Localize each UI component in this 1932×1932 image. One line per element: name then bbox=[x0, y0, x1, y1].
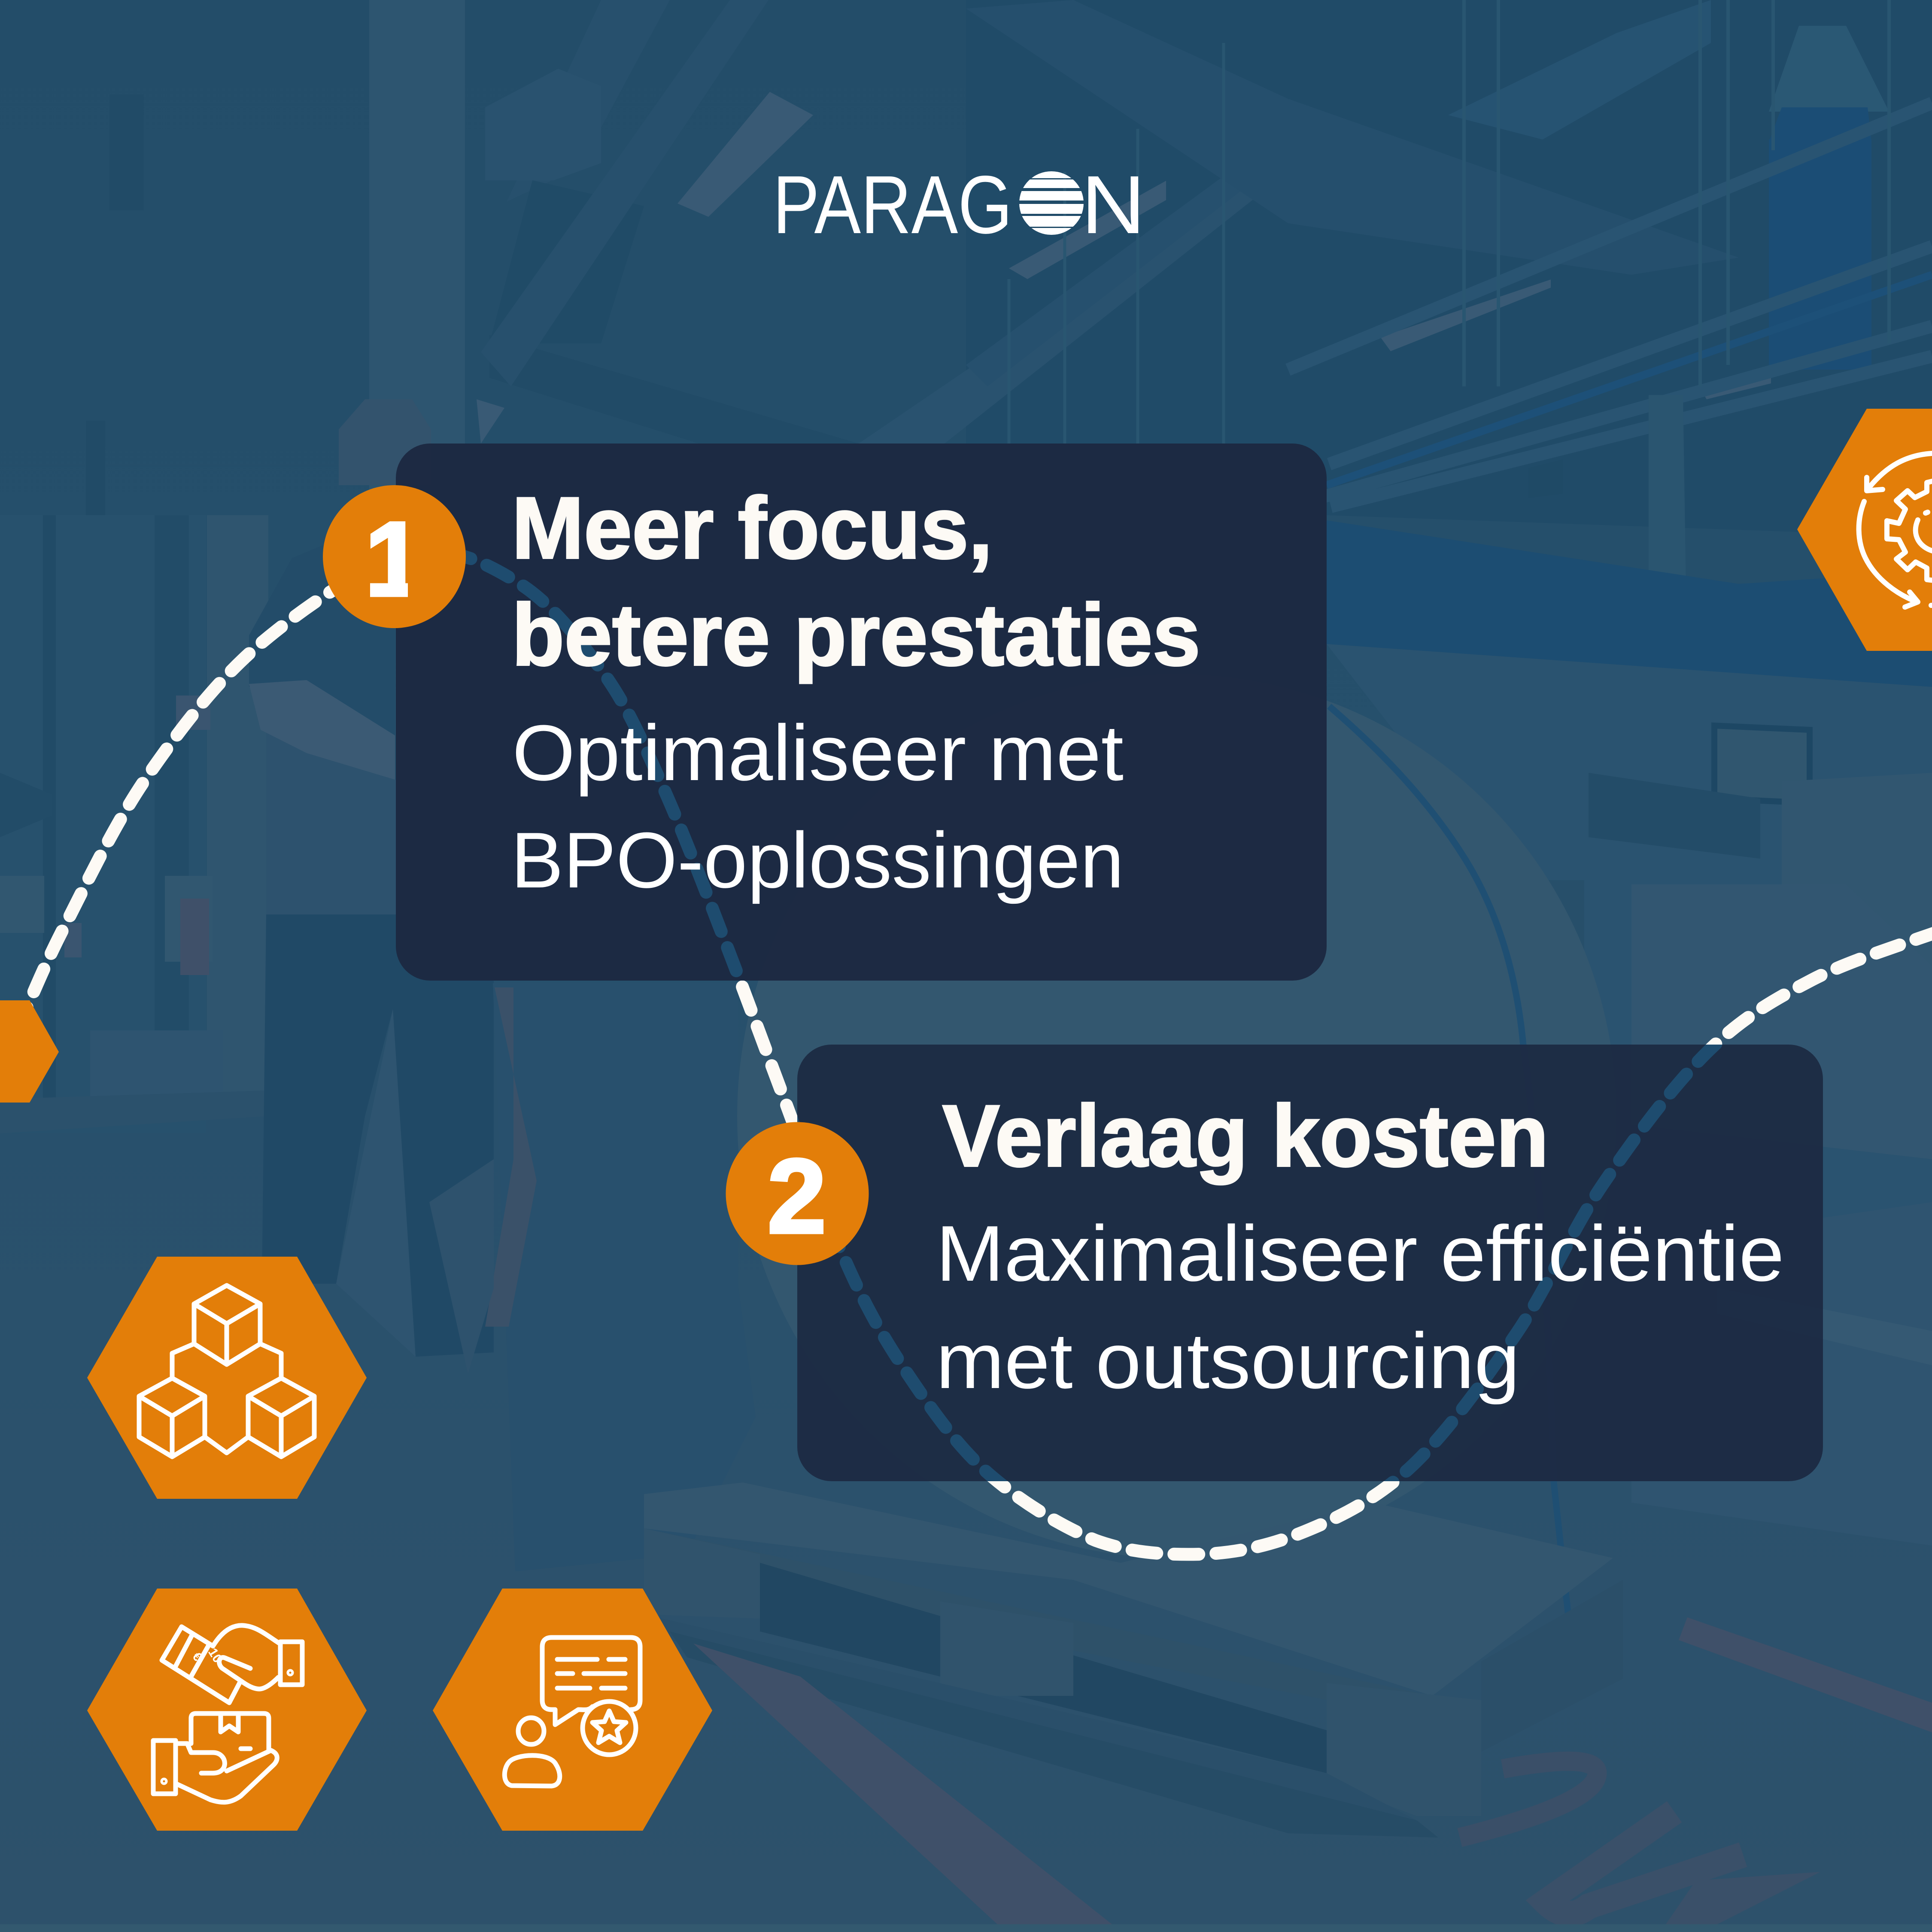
panel: step 2 bbox=[797, 1045, 1823, 1481]
hexagon icon: payment and parcel bbox=[87, 1589, 367, 1831]
pallet bbox=[644, 1482, 1613, 1696]
logo: Paragon: O bbox=[1026, 158, 1090, 251]
step 1 heading bbox=[512, 479, 1200, 684]
coil strap bbox=[1329, 706, 1570, 1631]
machinery right bbox=[1327, 644, 1932, 1245]
logo: Paragon bbox=[778, 171, 1139, 235]
logo globe bbox=[1018, 171, 1086, 236]
panel: step 1 bbox=[396, 444, 1327, 981]
step 1 body text bbox=[511, 708, 1124, 904]
banknote labels: 10 bbox=[205, 1646, 225, 1665]
number badge 1 bbox=[323, 485, 466, 628]
step 1 body text: BPO-oplossingen bbox=[511, 816, 1124, 904]
ceiling beams and ducts bbox=[966, 0, 1932, 537]
banknote labels: € bbox=[189, 1650, 205, 1664]
step 2 body text: met outsourcing bbox=[936, 1316, 1520, 1405]
number badge 1: 1 bbox=[365, 500, 423, 618]
blue duct bbox=[1327, 520, 1932, 687]
number badge 2 bbox=[726, 1122, 869, 1265]
hexagon icon: process gear, cut by right edge bbox=[1797, 409, 1932, 651]
bottom strip bbox=[0, 1924, 1932, 1932]
dashed route: white segments outside panels bbox=[17, 552, 1932, 1554]
step 2 body text bbox=[936, 1209, 1784, 1405]
banknote labels bbox=[189, 1646, 225, 1665]
step 1 heading: betere prestaties bbox=[512, 586, 1200, 684]
hexagon icon: boxes network bbox=[87, 1257, 367, 1499]
worker bbox=[339, 399, 431, 485]
hexagon icon: customer review bbox=[433, 1589, 712, 1831]
logo: Paragon: PARAG bbox=[773, 158, 1012, 251]
step 1 heading: Meer focus, bbox=[512, 479, 993, 577]
forklift bbox=[493, 983, 756, 1571]
dashed route: blue segments over panels bbox=[465, 550, 1722, 1481]
right shelving bbox=[1528, 459, 1563, 498]
hexagon: partial left bbox=[0, 1000, 59, 1103]
number badge 2: 2 bbox=[768, 1137, 826, 1255]
floor markings bbox=[693, 1643, 1112, 1924]
left shelves bbox=[0, 515, 206, 1133]
step 1 body text: Optimaliseer met bbox=[512, 708, 1124, 797]
long beams bbox=[1288, 103, 1932, 507]
logo: Paragon: N bbox=[1081, 158, 1145, 251]
step 2 heading: Verlaag kosten bbox=[942, 1087, 1549, 1185]
step 2 body text: Maximaliseer efficiëntie bbox=[936, 1209, 1784, 1297]
coil bbox=[737, 674, 1616, 1558]
